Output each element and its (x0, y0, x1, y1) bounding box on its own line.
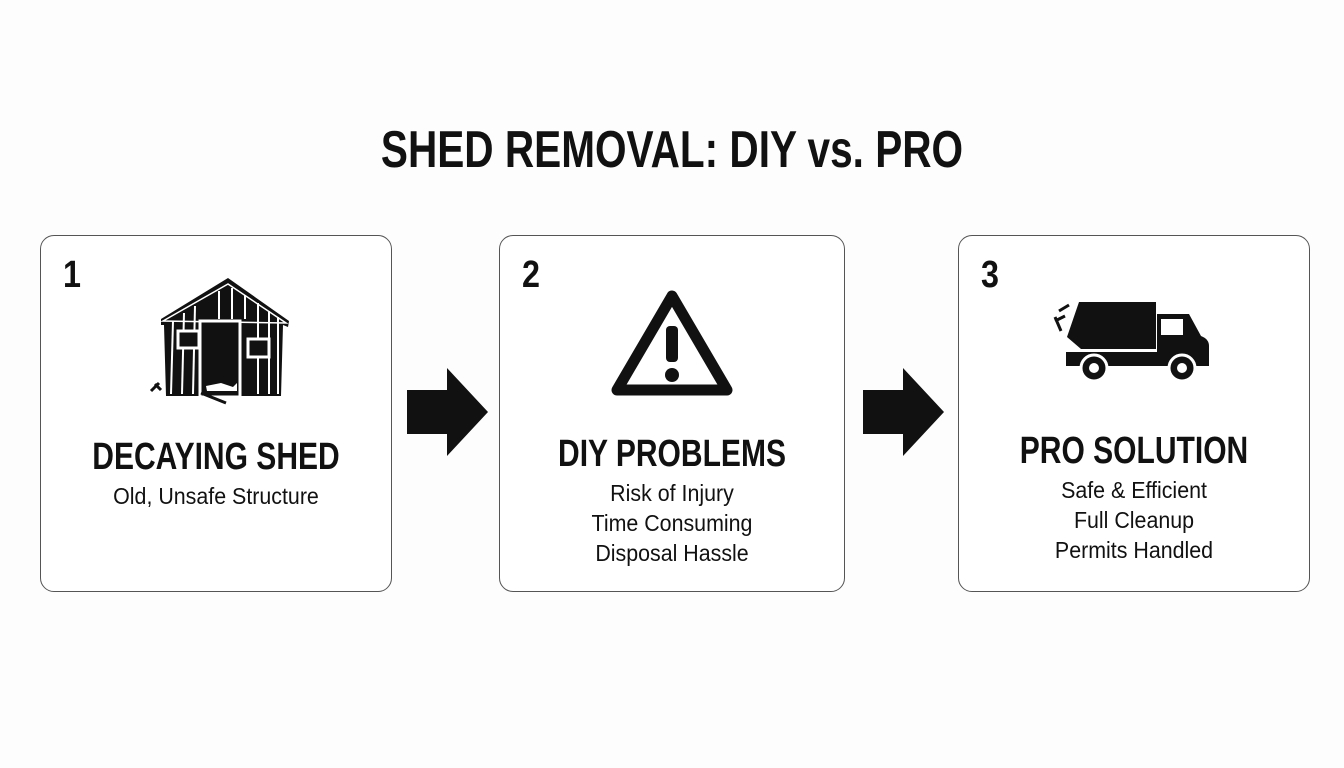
panel: diy problems (499, 235, 845, 592)
subtext: Full Cleanup (1074, 507, 1194, 533)
heading: DIY PROBLEMS (558, 433, 786, 475)
number 2: 2 (522, 254, 540, 296)
subtext: Old, Unsafe Structure (113, 483, 319, 509)
title: SHED REMOVAL: DIY vs. PRO (381, 121, 963, 179)
heading: PRO SOLUTION (1020, 430, 1248, 472)
number 3: 3 (981, 254, 999, 296)
heading: DECAYING SHED (92, 436, 340, 478)
subtext (1055, 477, 1213, 563)
arrow 2 (863, 368, 944, 456)
icon: shed (150, 278, 289, 404)
panel: decaying shed (40, 235, 392, 592)
arrow 1 (407, 368, 488, 456)
subtext (592, 480, 752, 566)
subtext: Risk of Injury (610, 480, 734, 506)
subtext: Safe & Efficient (1061, 477, 1207, 503)
icon: truck (1054, 302, 1209, 380)
subtext: Time Consuming (592, 510, 752, 536)
panel: pro solution (958, 235, 1310, 592)
icon: warning (612, 290, 732, 396)
subtext: Permits Handled (1055, 537, 1213, 563)
subtext: Disposal Hassle (595, 540, 749, 566)
number 1: 1 (63, 254, 81, 296)
